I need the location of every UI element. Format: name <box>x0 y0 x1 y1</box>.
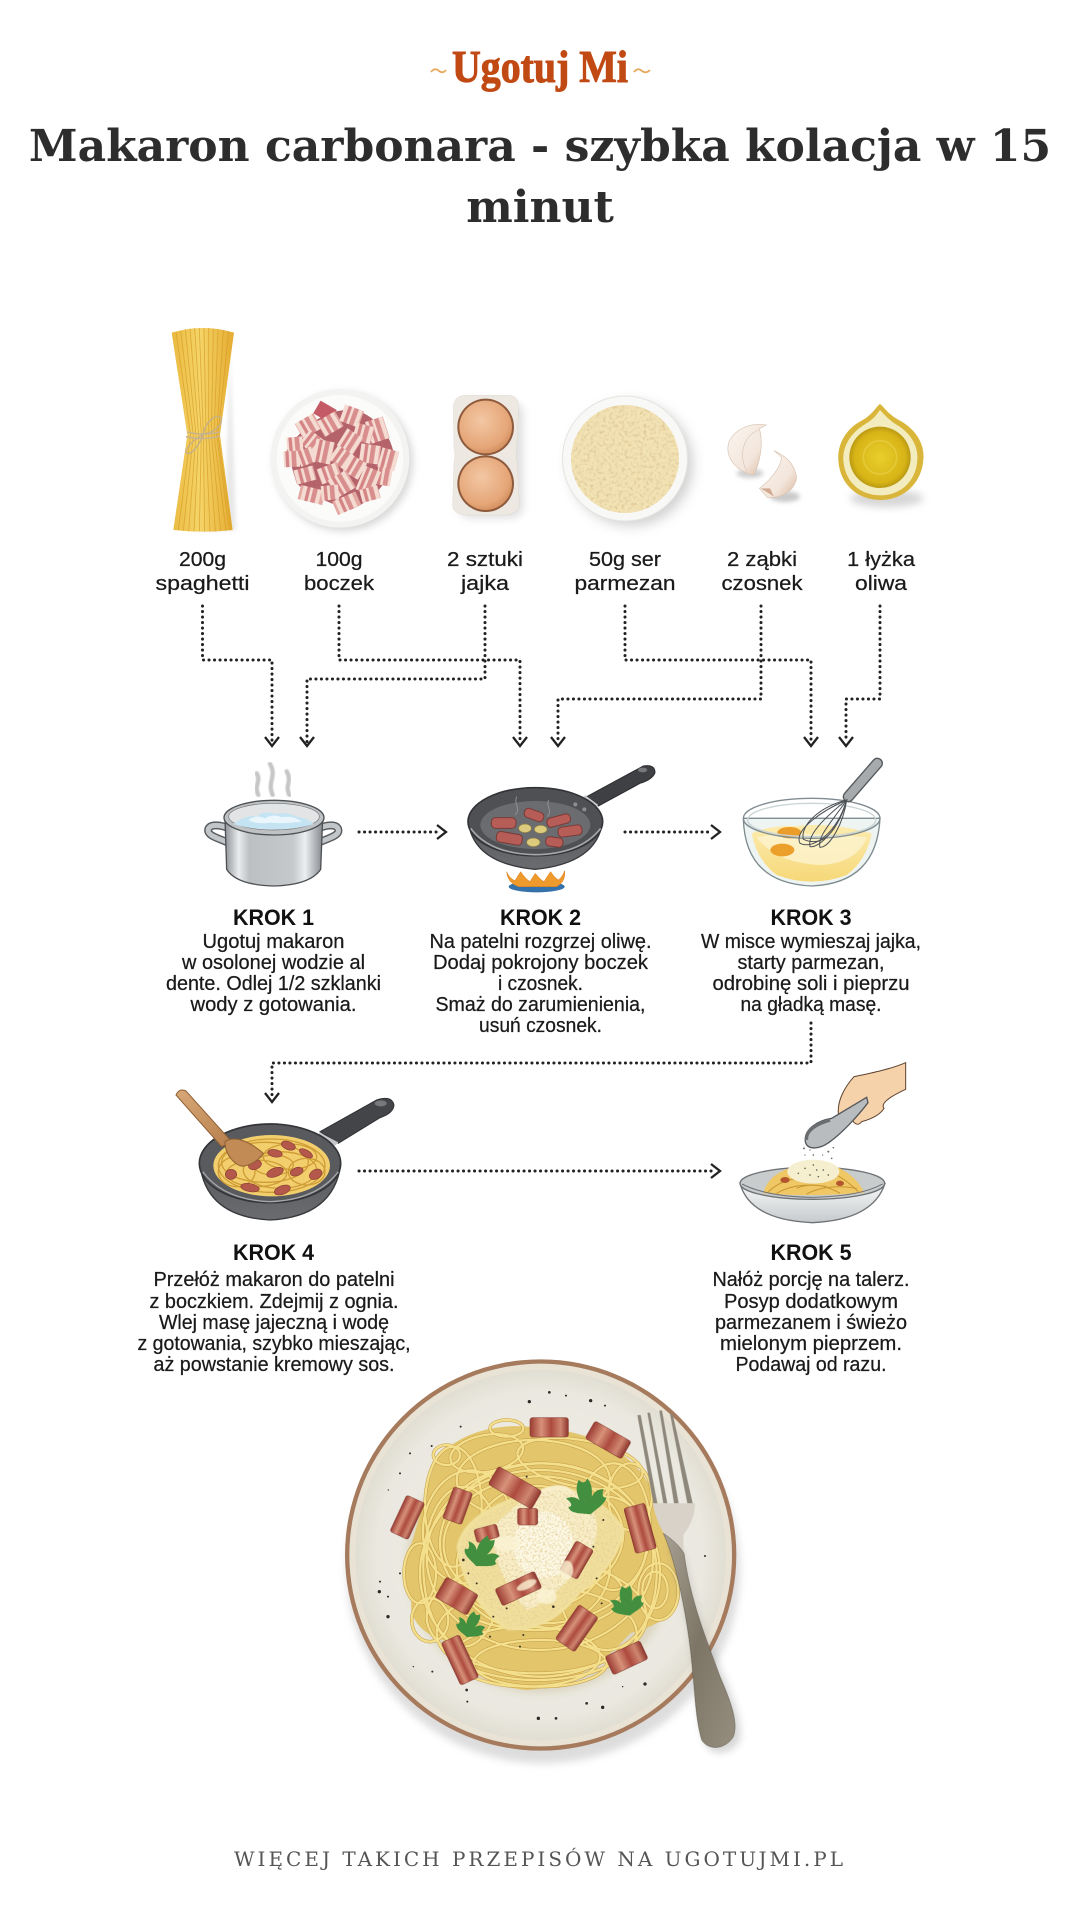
ingredient labels: 2 sztuki <box>447 549 523 571</box>
panel: step 3 <box>701 905 921 1016</box>
icon: final plate of carbonara with fork <box>345 1359 740 1763</box>
panel: ingredients <box>156 328 924 595</box>
ingredient labels <box>156 549 916 595</box>
panel: step 4: KROK 4 <box>233 1240 315 1265</box>
panel: step 3: starty parmezan, <box>738 952 884 974</box>
ingredient labels: spaghetti <box>156 573 250 595</box>
black pepper <box>462 1476 604 1648</box>
plate speckles <box>378 1391 706 1720</box>
arrows: ingredient connectors <box>202 606 880 746</box>
panel: step 2: usuń czosnek. <box>479 1015 602 1037</box>
panel: step 1: wody z gotowania. <box>189 994 356 1016</box>
panel: step 5: parmezanem i świeżo <box>715 1312 907 1334</box>
icon: mixing bowl with whisk <box>743 763 880 886</box>
panel: step 2: Dodaj pokrojony boczek <box>433 952 649 974</box>
panel: step 1: w osolonej wodzie al <box>181 952 365 974</box>
ingredient labels: parmezan <box>574 573 676 595</box>
icon: eggs in carton <box>453 395 523 518</box>
icon: plate with diced bacon <box>271 389 413 531</box>
panel: step 2: Smaż do zarumienienia, <box>436 994 646 1016</box>
panel: step 3: KROK 3 <box>770 905 852 930</box>
ingredient labels: 100g <box>316 549 362 571</box>
heading: Makaron carbonara - szybka kolacja w 15 <box>29 121 1051 172</box>
panel: step 1: KROK 1 <box>233 905 314 930</box>
arrow: step 4 to 5 <box>359 1164 720 1178</box>
panel: step 5: mielonym pieprzem. <box>720 1333 902 1355</box>
panel: step 5: KROK 5 <box>770 1240 852 1265</box>
panel: step 1 <box>166 905 381 1016</box>
ingredient labels: oliwa <box>855 573 908 595</box>
panel: step 4: z gotowania, szybko mieszając, <box>138 1333 410 1355</box>
icon: spaghetti bundle <box>172 328 236 532</box>
title logo: Ugotuj Mi: Ugotuj Mi <box>452 42 628 92</box>
panel: step 5: Podawaj od razu. <box>736 1354 886 1376</box>
panel: step 1: Ugotuj makaron <box>202 931 344 953</box>
panel: step 2: KROK 2 <box>500 905 581 930</box>
heading <box>29 121 1051 233</box>
arrow: step 3 to 4 <box>265 1023 811 1102</box>
panel: step 4 <box>138 1240 410 1376</box>
parsley leaves <box>453 1474 646 1642</box>
bacon pieces <box>390 1418 657 1685</box>
icon: bowl, tongs and hand <box>740 1063 906 1223</box>
icon: bowl of olive oil <box>838 404 924 507</box>
icon: frying pan on burner <box>468 766 655 892</box>
parmesan over bacon <box>493 1536 573 1604</box>
icon: garlic cloves <box>728 424 800 502</box>
ingredient labels: boczek <box>304 573 375 595</box>
panel: step 5: Nałóż porcję na talerz. <box>712 1269 910 1291</box>
heading: minut <box>466 182 614 233</box>
cheese-topped centre <box>457 1485 625 1631</box>
arrow: step 2 to 3 <box>625 825 720 839</box>
panel: step 2: Na patelni rozgrzej oliwę. <box>430 931 652 953</box>
ingredient labels: czosnek <box>722 573 804 595</box>
panel: step 5: Posyp dodatkowym <box>724 1291 898 1313</box>
fork <box>637 1411 740 1753</box>
ingredient labels: 200g <box>179 549 226 571</box>
panel: step 3: W misce wymieszaj jajka, <box>701 931 921 953</box>
icon: pan with pasta and wooden spoon <box>176 1090 394 1220</box>
panel: step 3: odrobinę soli i pieprzu <box>712 973 910 995</box>
ingredient labels: 1 łyżka <box>847 549 916 571</box>
ingredient labels: jajka <box>460 573 510 595</box>
ingredient labels: 50g ser <box>589 549 661 571</box>
panel: step 4: Wlej masę jajeczną i wodę <box>159 1312 389 1334</box>
panel: step 4: aż powstanie kremowy sos. <box>154 1354 394 1376</box>
icon: bowl of grated parmesan <box>562 396 693 526</box>
ingredient labels: 2 ząbki <box>727 549 797 571</box>
panel: step 2: i czosnek. <box>498 973 583 995</box>
panel: step 2 <box>430 905 652 1037</box>
panel: step 4: z boczkiem. Zdejmij z ognia. <box>150 1291 398 1313</box>
panel: step 5 <box>712 1240 910 1376</box>
footer: WIĘCEJ TAKICH PRZEPISÓW NA UGOTUJMI.PL <box>234 1846 846 1871</box>
panel: step 3: na gładką masę. <box>740 994 882 1016</box>
panel: step 4: Przełóż makaron do patelni <box>154 1269 394 1291</box>
arrow: step 1 to 2 <box>359 825 446 839</box>
panel: step 1: dente. Odlej 1/2 szklanki <box>166 973 381 995</box>
icon: boiling pot <box>208 764 338 886</box>
